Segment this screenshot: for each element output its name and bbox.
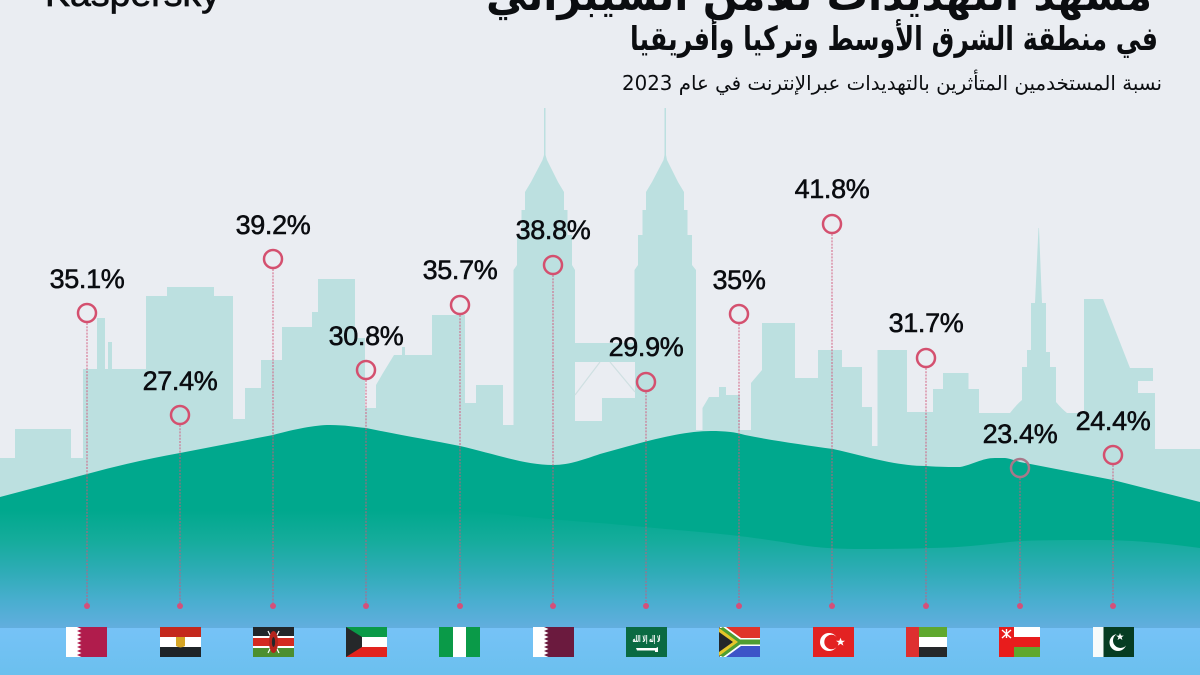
bottom band: [0, 628, 1200, 675]
pin: 35%: [712, 265, 766, 609]
pin: 30.8%: 30.8%: [329, 321, 404, 351]
pin: 35.1%: 35.1%: [50, 264, 125, 294]
flag: Pakistan: [1093, 627, 1134, 657]
sea gradient: [0, 510, 1200, 628]
pin: 29.9%: [609, 332, 684, 609]
pin: 27.4%: 27.4%: [143, 366, 218, 396]
caption: نسبة المستخدمين المتأثرين بالتهديدات عبرالإنترنت في عام 2023: [622, 69, 1162, 96]
flag: United Arab Emirates: [906, 627, 947, 657]
flag: Qatar: [66, 627, 107, 657]
pin: 29.9%: 29.9%: [609, 332, 684, 362]
flag: Turkey: [813, 627, 854, 657]
flag: Nigeria: [439, 627, 480, 657]
pin: 31.7%: 31.7%: [889, 308, 964, 338]
pin: 23.4%: [983, 419, 1058, 609]
flag: Qatar (maroon): [533, 627, 574, 657]
flag: Egypt: [160, 627, 201, 657]
pin: 38.8%: [516, 215, 591, 609]
city skyline: [0, 108, 1200, 520]
flag: South Africa: [719, 627, 760, 657]
pin: 35.7%: [423, 255, 498, 609]
pin: 27.4%: [143, 366, 218, 609]
flag: Kenya: [253, 627, 294, 657]
pin: 24.4%: [1076, 406, 1151, 609]
pin: 23.4%: 23.4%: [983, 419, 1058, 449]
flag: Oman: [999, 627, 1040, 657]
pin: 38.8%: 38.8%: [516, 215, 591, 245]
flag: Saudi Arabia: [626, 627, 667, 657]
pin: 30.8%: [329, 321, 404, 609]
green hill: [0, 425, 1200, 549]
pin: 35.7%: 35.7%: [423, 255, 498, 285]
pin: 41.8%: [795, 174, 870, 609]
pin: 39.2%: 39.2%: [236, 210, 311, 240]
pin: 24.4%: 24.4%: [1076, 406, 1151, 436]
pin: 39.2%: [236, 210, 311, 609]
flag: Kuwait: [346, 627, 387, 657]
pin: 35%: 35%: [712, 265, 766, 295]
pin: 41.8%: 41.8%: [795, 174, 870, 204]
pin: 31.7%: [889, 308, 964, 609]
pin: 35.1%: [50, 264, 125, 609]
flag: Saudi Arabia: لا إله إلا الله: [632, 635, 660, 645]
